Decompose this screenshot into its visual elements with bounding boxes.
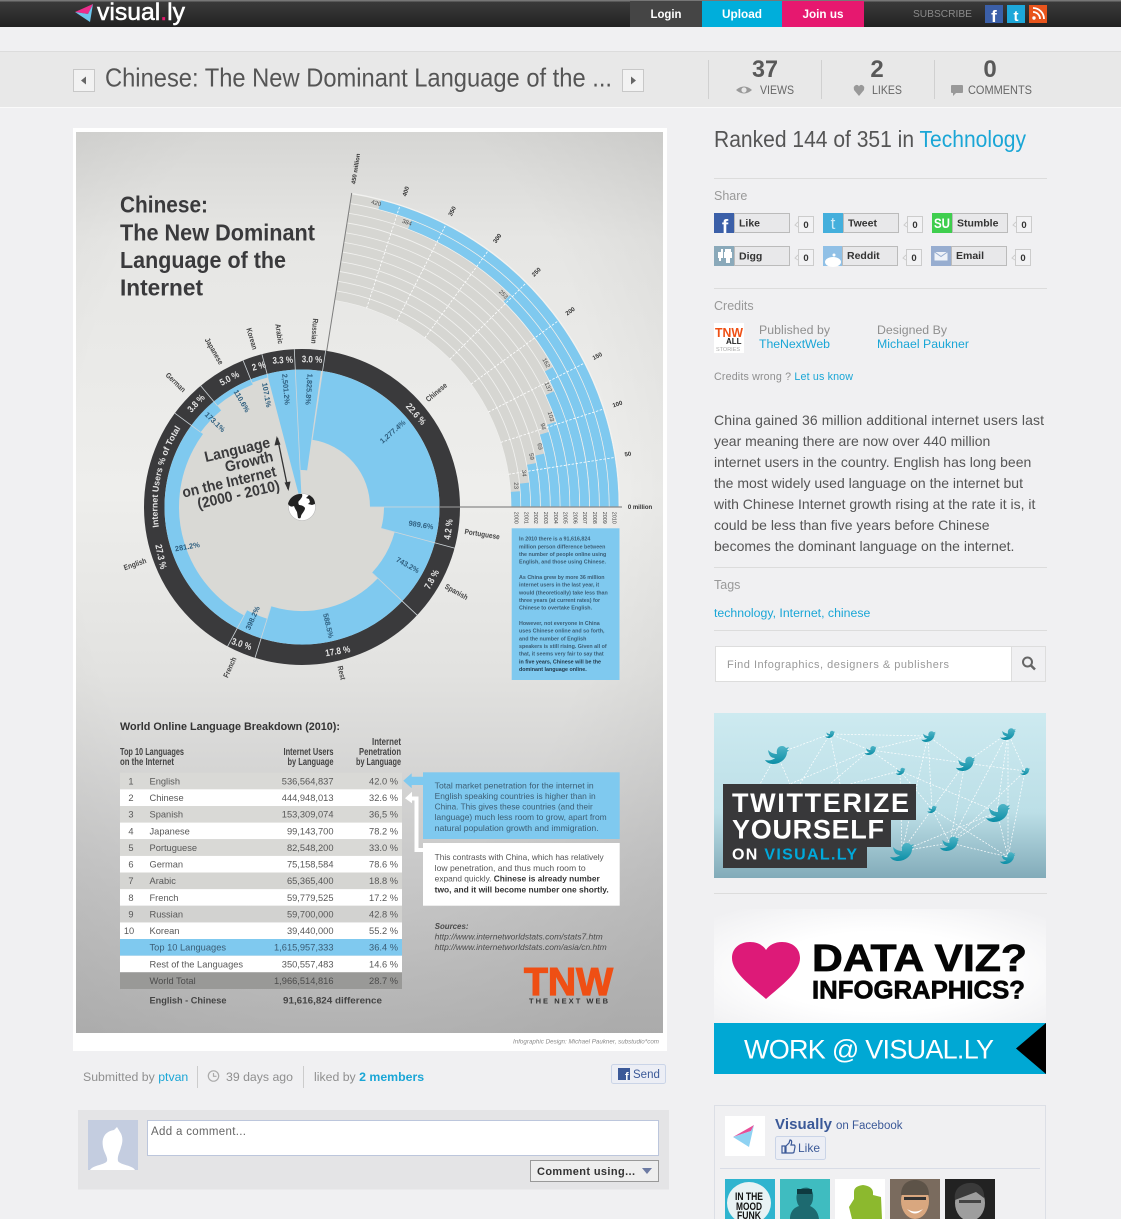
data value labels: 162 xyxy=(540,357,551,370)
nav: join us: Join us xyxy=(802,7,844,21)
ring share labels: 17.8 % xyxy=(324,643,351,658)
table column headers: Penetration xyxy=(359,746,401,758)
text box: 2010 difference summary xyxy=(512,528,620,680)
year labels: 2001 xyxy=(522,512,528,524)
text box: 2010 difference summary: dominant language online. xyxy=(519,667,587,673)
text box: 2010 difference summary: million person difference between xyxy=(519,544,605,550)
table rows text: 32.6 % xyxy=(369,793,398,803)
language name labels: Russian xyxy=(309,318,318,344)
axis tick labels: 50 xyxy=(624,451,632,458)
callout: English penetration xyxy=(403,772,620,839)
banner footer xyxy=(714,1023,1046,1074)
table difference row xyxy=(150,996,382,1006)
TNW logo: TNW xyxy=(524,961,613,1004)
banner: twitterize yourself xyxy=(714,713,1046,878)
table column headers xyxy=(120,736,401,768)
growth percentage labels: 173.1% xyxy=(203,410,227,434)
data value labels: 253 xyxy=(497,289,509,301)
sidebar: description paragraph xyxy=(713,412,1044,554)
growth percentage labels: 110.6% xyxy=(232,388,252,414)
TNW logo: THE NEXT WEB xyxy=(529,996,609,1006)
table rows text: 59,700,000 xyxy=(287,910,334,920)
ring share labels: 27.3 % xyxy=(153,543,169,570)
previous arrow xyxy=(74,70,94,92)
table rows text: 78.2 % xyxy=(369,826,398,836)
submission meta row: 39 days ago xyxy=(226,1070,293,1084)
growth percentage labels: 743.2% xyxy=(395,555,421,575)
year labels: 2008 xyxy=(591,512,597,524)
facebook fan avatars xyxy=(725,1179,995,1219)
infographic frame xyxy=(73,128,667,1051)
blue value arcs xyxy=(0,93,716,921)
sidebar: tags: Tags xyxy=(714,578,740,592)
data value labels: 23 xyxy=(512,482,518,490)
share: stumble: 0 xyxy=(1021,220,1027,231)
comment using button: Comment using... xyxy=(537,1166,635,1178)
page title: Chinese: The New Dominant Language of the ... xyxy=(105,62,612,92)
callout: English penetration: English speaking countries is higher than in xyxy=(435,792,596,801)
ring share labels: 3.0 % xyxy=(302,354,323,365)
share: stumble: SU xyxy=(934,215,950,231)
data value labels xyxy=(370,200,554,490)
table rows text: Japanese xyxy=(150,826,190,836)
axis tick labels: 150 xyxy=(592,352,604,362)
chart heading: language growth xyxy=(181,434,281,513)
year labels xyxy=(512,512,617,524)
sources: Sources: xyxy=(435,922,469,931)
year labels: 2010 xyxy=(611,512,617,524)
visually icon xyxy=(725,1116,765,1156)
table rows text: 28.7 % xyxy=(369,976,398,986)
language name labels: German xyxy=(164,372,186,394)
table column headers: by Language xyxy=(288,756,334,768)
banner label: TWITTERIZE xyxy=(732,788,909,818)
axis tick labels: 350 xyxy=(448,205,458,218)
facebook send button: Send xyxy=(633,1069,660,1081)
table rows text: 82,548,200 xyxy=(287,843,334,853)
sidebar: share section xyxy=(714,189,1032,267)
share: digg: Digg xyxy=(739,250,762,262)
table rows text: World Total xyxy=(150,976,196,986)
callout: English penetration: China. This gives these countries (and their xyxy=(435,802,593,812)
language name labels: French xyxy=(223,656,239,679)
table rows text: 1 xyxy=(128,776,134,786)
share: digg: 0 xyxy=(803,253,809,264)
sources: http://www.internetworldstats.com/stats7.htm xyxy=(435,933,603,942)
stat: views: VIEWS xyxy=(760,83,794,97)
icon: globe xyxy=(288,494,316,520)
table rows text: 9 xyxy=(128,910,134,920)
text box: 2010 difference summary: that, it seems very fair to say that xyxy=(519,652,604,658)
table: world online language breakdown xyxy=(120,736,402,1006)
table rows text: Top 10 Languages xyxy=(150,943,226,953)
year labels: 2002 xyxy=(532,512,538,524)
axis tick labels: 400 xyxy=(402,185,411,197)
table rows text: Portuguese xyxy=(150,843,197,853)
comment input: Add a comment... xyxy=(151,1126,246,1138)
stat: views xyxy=(708,56,794,99)
text box: 2010 difference summary: However, not everyone in China xyxy=(519,621,600,627)
language name labels: Arabic xyxy=(273,324,283,345)
callout: China contrast: This contrasts with China, which has relatively xyxy=(435,853,605,862)
share: reddit: Reddit xyxy=(847,250,880,262)
sidebar: ranking heading: Ranked 144 of 351 in Technology xyxy=(714,126,1026,152)
data value labels: 103 xyxy=(546,411,554,423)
table rows text: Russian xyxy=(150,910,183,920)
sidebar: credits section: Designed By xyxy=(877,323,948,337)
table rows text: 4 xyxy=(128,826,134,836)
TNW thumbnail: ALL xyxy=(726,337,742,346)
table heading: World Online Language Breakdown (2010): xyxy=(120,721,340,733)
text box: 2010 difference summary: As China grew by more 36 million xyxy=(519,575,605,581)
submission meta row: liked by 2 members xyxy=(314,1070,424,1084)
sidebar: description paragraph: could be less than five years before Chinese xyxy=(714,517,990,533)
text box: 2010 difference summary: three years (at current rates) for xyxy=(519,598,600,604)
sidebar: description paragraph: with Chinese Internet growth rising at the rate it is, it xyxy=(713,496,1035,512)
axis tick labels xyxy=(351,153,652,511)
banner label: ON VISUAL.LY xyxy=(732,846,857,864)
text box: 2010 difference summary: would (theoretically) take less than xyxy=(518,590,608,596)
language name labels xyxy=(123,318,500,681)
table row backgrounds xyxy=(120,773,402,989)
search box xyxy=(716,646,1046,682)
stat: comments xyxy=(934,56,1032,99)
comment input xyxy=(148,1120,658,1156)
table rows text: 8 xyxy=(128,893,134,903)
table rows text: Spanish xyxy=(150,810,183,820)
table rows text: 36,5 % xyxy=(369,810,398,820)
table difference row: 91,616,824 difference xyxy=(283,996,382,1006)
table rows text: 99,143,700 xyxy=(287,826,334,836)
text box: 2010 difference summary: and the number of English xyxy=(519,636,586,642)
table rows text: 536,564,837 xyxy=(282,776,334,786)
infographic title: Chinese: xyxy=(120,192,208,218)
language name labels: Korean xyxy=(244,327,258,351)
banner headline: DATA VIZ? xyxy=(812,938,1027,980)
sidebar: tags: technology, Internet, chinese xyxy=(714,606,870,620)
year labels: 2000 xyxy=(512,512,518,524)
table rows text: 5 xyxy=(128,843,134,853)
table rows text: 42.8 % xyxy=(369,910,398,920)
sidebar: description paragraph: China gained 36 million additional internet users last xyxy=(714,412,1044,428)
callout: China contrast: low penetration, and thus much room to xyxy=(435,864,586,873)
sidebar: description paragraph: the most widely used language on the internet but xyxy=(714,475,1023,491)
axis tick labels: 450 million xyxy=(351,153,362,185)
top navigation bar xyxy=(0,0,1121,27)
growth percentage labels: 1,277.4% xyxy=(378,418,408,445)
table rows text: French xyxy=(150,893,178,903)
share: email: Email xyxy=(956,250,984,262)
share: like: f xyxy=(722,217,729,238)
sidebar: credits section xyxy=(714,299,969,383)
table rows text: 7 xyxy=(128,876,134,886)
sidebar: credits section: TheNextWeb xyxy=(759,337,830,351)
data value labels: 69 xyxy=(535,443,543,451)
sidebar: description paragraph: year meaning there are now over 440 million xyxy=(714,433,990,449)
callout: English penetration: language) much less room to grow, apart from xyxy=(435,813,607,822)
facebook send button: f xyxy=(625,1071,629,1083)
share: digg xyxy=(714,246,814,266)
stat: likes xyxy=(821,56,902,99)
comment box xyxy=(78,1110,669,1190)
text box: 2010 difference summary: English, and those using Chinese. xyxy=(519,560,607,566)
text box: 2010 difference summary: In 2010 there is a 91,616,824 xyxy=(519,537,590,543)
ring share labels: 4.2 % xyxy=(442,518,455,540)
share: tweet xyxy=(823,213,922,233)
growth percentage labels xyxy=(174,373,435,639)
data value labels: 137 xyxy=(543,382,552,394)
table rows text: 14.6 % xyxy=(369,959,398,969)
banner footer: WORK @ VISUAL.LY xyxy=(744,1034,994,1064)
share: like: 0 xyxy=(803,220,809,231)
facebook fan avatars: IN THE xyxy=(735,1191,763,1203)
language name labels: Chinese xyxy=(425,382,449,404)
ring share labels: 7.8 % xyxy=(422,568,441,591)
callout: China contrast xyxy=(405,792,620,906)
table rows text: Korean xyxy=(150,926,179,936)
subscribe icons: t xyxy=(1014,8,1018,25)
sidebar: credits section: Credits wrong ? Let us know xyxy=(714,371,853,383)
axis tick labels: 300 xyxy=(493,233,504,245)
table rows text: 33.0 % xyxy=(369,843,398,853)
table rows text: 18.8 % xyxy=(369,876,398,886)
TNW thumbnail: STORIES xyxy=(716,347,740,353)
sidebar: tags xyxy=(714,578,870,620)
axis tick labels: 0 million xyxy=(628,505,652,511)
quarter-ring chart: Chinese internet users 2000-2010 xyxy=(0,93,716,921)
table column headers: Top 10 Languages xyxy=(120,746,184,758)
text box: 2010 difference summary: Chinese to overtake English. xyxy=(519,606,593,612)
growth percentage labels: 2,501.2% xyxy=(280,373,292,406)
twitter birds xyxy=(765,728,1030,864)
icon: clock xyxy=(208,1071,219,1081)
chart heading: language growth: on the Internet xyxy=(181,463,278,501)
table rows text: English xyxy=(150,776,180,786)
growth percentage labels: 398.2% xyxy=(243,604,262,631)
growth percentage labels: 281.2% xyxy=(174,540,201,553)
infographic title xyxy=(120,192,315,300)
language name labels: Japanese xyxy=(203,337,224,366)
share: reddit: 0 xyxy=(911,253,917,264)
infographic credit: Infographic Design: Michael Paukner, substudio*com xyxy=(513,1040,659,1046)
ring share labels: 3.0 % xyxy=(230,636,253,652)
sidebar: description paragraph: internet users in the country. English has long been xyxy=(714,454,1031,470)
table difference row: English - Chinese xyxy=(150,996,226,1006)
facebook like button: Like xyxy=(798,1141,820,1155)
share: tweet: t xyxy=(831,214,836,233)
table rows text: 2 xyxy=(128,793,134,803)
stat: views: 37 xyxy=(752,56,778,83)
text box: 2010 difference summary: internet users in the last year, it xyxy=(519,583,599,589)
data value labels: 59 xyxy=(527,453,534,461)
table rows text: 10 xyxy=(124,926,134,936)
year labels: 2009 xyxy=(601,512,607,524)
table rows text: 1,966,514,816 xyxy=(274,976,334,986)
sources xyxy=(435,922,607,952)
share: like: Like xyxy=(739,218,760,230)
table rows text: 1,615,957,333 xyxy=(274,943,334,953)
callout: English penetration: natural population growth and immigration. xyxy=(435,824,599,833)
table rows text: Arabic xyxy=(150,876,176,886)
share: stumble: Stumble xyxy=(957,218,999,230)
table column headers: Internet xyxy=(372,736,401,748)
data value labels: 420 xyxy=(370,200,382,208)
facebook fan avatars: MOOD xyxy=(736,1201,762,1213)
table rows text: 350,557,483 xyxy=(282,959,334,969)
stat: comments: COMMENTS xyxy=(968,83,1032,97)
table rows text: 42.0 % xyxy=(369,776,398,786)
growth percentage labels: 107.1% xyxy=(260,382,273,409)
axis tick labels: 250 xyxy=(531,267,543,278)
share: reddit xyxy=(823,246,922,267)
infographic title: The New Dominant xyxy=(120,220,315,246)
stat: likes: 2 xyxy=(870,56,884,83)
table rows text: 59,779,525 xyxy=(287,893,334,903)
arrow: growth scale xyxy=(274,436,290,491)
share: tweet: 0 xyxy=(912,220,918,231)
sidebar: share section: Share xyxy=(714,189,747,203)
TNW thumbnail: TNW xyxy=(715,325,744,340)
nav: login xyxy=(630,1,702,27)
data value labels: 384 xyxy=(401,219,413,228)
chart heading: language growth: Growth xyxy=(223,448,275,476)
chart heading: language growth: (2000 - 2010) xyxy=(196,477,281,513)
search box: Find Infographics, designers & publishers xyxy=(727,659,950,671)
banner headline xyxy=(812,938,1027,1004)
table rows text: 78.6 % xyxy=(369,860,398,870)
ring share labels: Internet Users % of Total xyxy=(152,425,180,528)
ring share labels: 22.6 % xyxy=(404,401,428,427)
language name labels: English xyxy=(123,558,148,572)
callout: China contrast: two, and it will become number one shortly. xyxy=(435,886,609,894)
facebook like box: on Facebook xyxy=(836,1120,903,1132)
facebook like box: Visually xyxy=(775,1116,833,1133)
stat: comments: 0 xyxy=(983,56,997,83)
title band xyxy=(0,51,1121,108)
subscribe label: SUBSCRIBE xyxy=(913,8,972,20)
share: tweet: Tweet xyxy=(848,218,877,230)
infographic title: Internet xyxy=(120,274,203,300)
language name labels: Rest xyxy=(335,665,346,681)
table rows text: 444,948,013 xyxy=(282,793,334,803)
submission meta row xyxy=(83,1066,424,1088)
growth percentage labels: 1,825.8% xyxy=(303,373,315,406)
share: email xyxy=(931,246,1030,266)
ring share labels: 3.8 % xyxy=(185,392,207,415)
text box: 2010 difference summary: uses Chinese online and so forth, xyxy=(519,629,605,635)
icon: magnifier xyxy=(1023,658,1035,670)
table rows text: 39,440,000 xyxy=(287,926,334,936)
ring share labels: 5.0 % xyxy=(218,369,241,388)
year labels: 2005 xyxy=(562,512,568,524)
axis tick labels: 100 xyxy=(612,400,624,409)
banner label xyxy=(723,784,916,868)
nav: upload: Upload xyxy=(722,7,762,21)
table rows text: 6 xyxy=(128,860,134,870)
year labels: 2007 xyxy=(581,512,587,524)
text box: 2010 difference summary: the number of people online using xyxy=(519,552,606,558)
growth percentage labels: 989.6% xyxy=(408,519,435,531)
table rows text: 55.2 % xyxy=(369,926,398,936)
blue growth sectors xyxy=(112,317,492,697)
nav: upload xyxy=(702,1,782,27)
language growth circular chart xyxy=(123,318,622,681)
TNW thumbnail xyxy=(714,323,744,353)
ring share labels: 2 % xyxy=(251,359,267,373)
banner headline: INFOGRAPHICS? xyxy=(812,976,1025,1004)
ring share labels: 3.3 % xyxy=(272,354,293,366)
table rows text: 3 xyxy=(128,810,134,820)
table rows text: 17.2 % xyxy=(369,893,398,903)
icon: heart xyxy=(732,942,800,999)
language name labels: Spanish xyxy=(443,583,469,602)
grey ring tracks xyxy=(0,150,659,864)
comment using button xyxy=(530,1160,658,1182)
year labels: 2006 xyxy=(571,512,577,524)
share: email: 0 xyxy=(1020,253,1026,264)
submission meta row: Submitted by ptvan xyxy=(83,1070,188,1084)
facebook like button xyxy=(776,1136,826,1160)
table rows text: 36.4 % xyxy=(369,943,398,953)
callout: English penetration: Total market penetration for the internet in xyxy=(435,781,594,790)
table rows text: Chinese xyxy=(150,793,184,803)
share: stumble xyxy=(932,213,1032,233)
ring share labels xyxy=(152,354,455,658)
year labels: 2003 xyxy=(542,512,548,524)
sidebar: credits section: Michael Paukner xyxy=(877,337,969,351)
subscribe icons: f xyxy=(991,7,997,26)
facebook like box xyxy=(714,1106,1046,1219)
table rows text: Rest of the Languages xyxy=(150,959,243,969)
next arrow xyxy=(622,70,644,92)
table column headers: by Language xyxy=(356,756,401,768)
avatar placeholder xyxy=(88,1120,138,1170)
table rows text xyxy=(124,776,398,986)
sidebar: credits section: Credits xyxy=(714,299,754,313)
data value labels: 34 xyxy=(520,470,527,478)
text box: 2010 difference summary: speakers is still rising. Given all of xyxy=(519,644,607,650)
table rows text: 65,365,400 xyxy=(287,876,334,886)
facebook send button xyxy=(612,1064,666,1084)
nav: login: Login xyxy=(650,7,682,21)
text box: 2010 difference summary: in five years, Chinese will be the xyxy=(519,659,601,665)
nav: join us xyxy=(782,1,864,27)
table column headers: Internet Users xyxy=(284,746,334,758)
language name labels: Portuguese xyxy=(464,528,500,542)
subscribe icons xyxy=(985,5,1047,26)
callout: China contrast: expand quickly. Chinese is already number xyxy=(435,874,601,884)
sidebar: credits section: Published by xyxy=(759,323,831,337)
stat: likes: LIKES xyxy=(872,83,902,97)
table column headers: on the Internet xyxy=(120,756,174,768)
sidebar: description paragraph: becomes the dominant language on the internet. xyxy=(714,538,1014,554)
data value labels: 94 xyxy=(539,423,546,431)
share: like xyxy=(714,213,814,238)
axis tick labels: 200 xyxy=(565,306,577,317)
growth percentage labels: 588.5% xyxy=(321,612,336,639)
infographic title: Language of the xyxy=(120,247,286,273)
year labels: 2004 xyxy=(552,512,558,524)
table rows text: German xyxy=(150,860,183,870)
sources: http://www.internetworldstats.com/asia/cn.htm xyxy=(435,943,607,952)
chart heading: language growth: Language xyxy=(203,434,272,466)
table rows text: 153,309,074 xyxy=(282,810,334,820)
banner label: YOURSELF xyxy=(732,814,884,844)
banner: data viz jobs xyxy=(714,909,1046,1074)
table rows text: 75,158,584 xyxy=(287,860,334,870)
